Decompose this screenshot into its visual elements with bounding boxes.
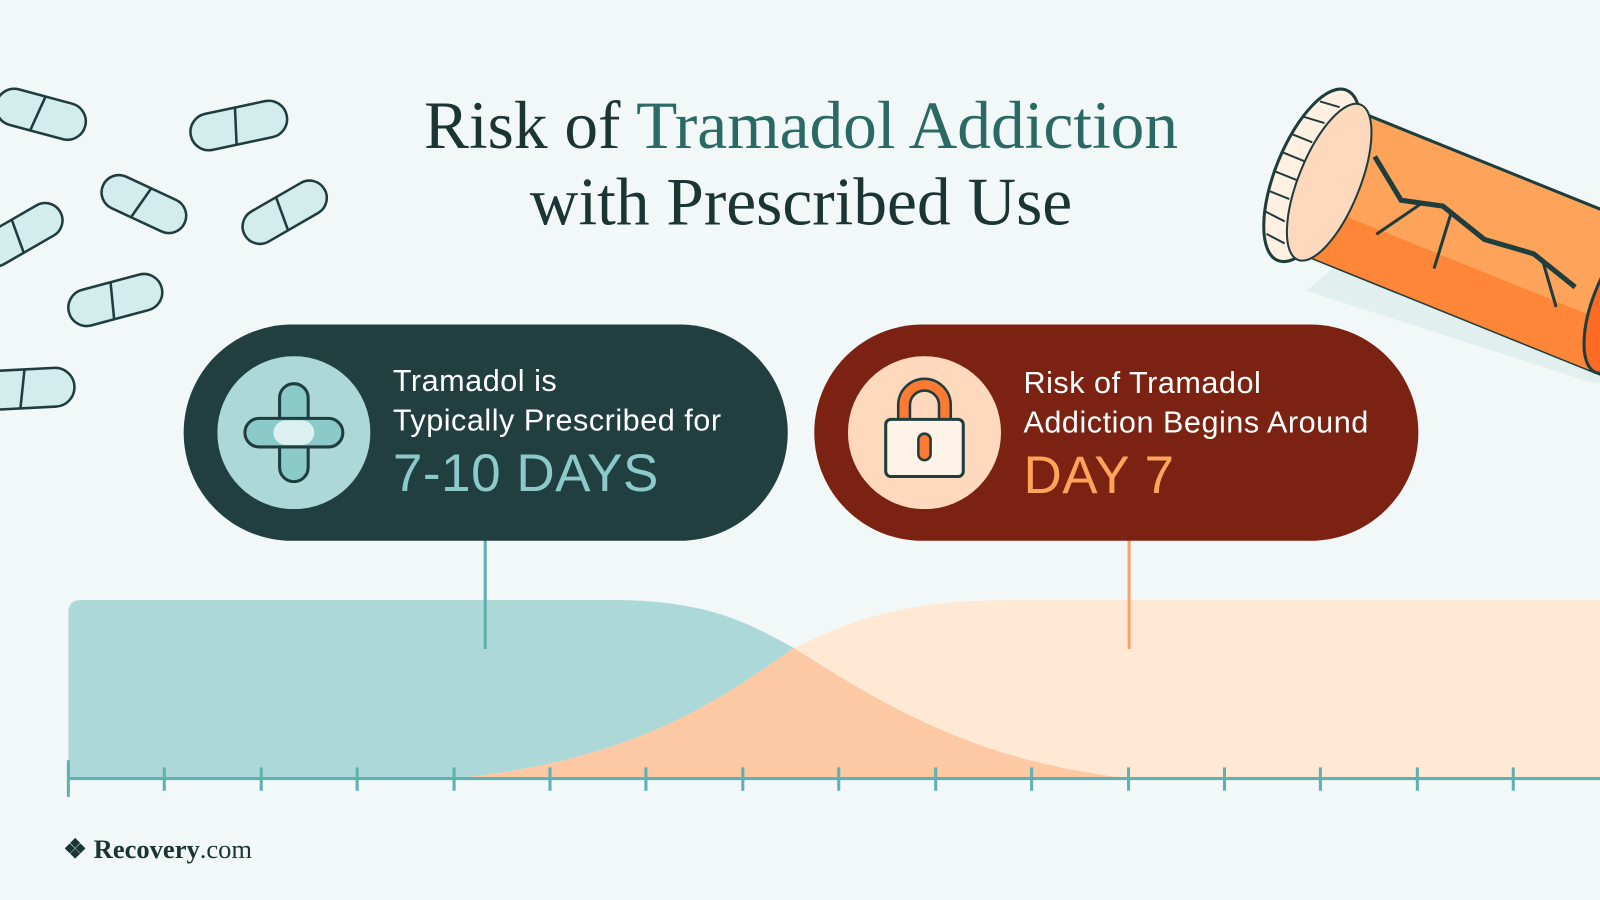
text: addiction [1023,366,1369,505]
text: prescribed [393,364,722,503]
text: addiction: DAY 7 [1023,446,1174,505]
logo: ❖ Recovery.com [63,835,252,864]
icon: bandage cross [217,356,370,510]
title [424,89,1178,240]
panel: prescribed [184,324,788,541]
text: prescribed: Typically Prescribed for [393,404,722,438]
connector: orange [1128,539,1131,649]
text: addiction: Risk of Tramadol [1023,366,1261,400]
text: prescribed: 7-10 DAYS [393,444,659,503]
icon: padlock [848,356,1001,510]
panel: addiction risk [814,324,1418,541]
text: addiction: Addiction Begins Around [1023,406,1369,440]
title: Risk of Tramadol Addiction [424,89,1178,163]
timeline chart [66,600,1600,797]
title: with Prescribed Use [530,165,1072,240]
text: prescribed: Tramadol is [393,364,557,398]
connector: teal [484,539,487,649]
icon: cracked pill bottle [1262,88,1600,382]
decorative pills [0,88,328,411]
